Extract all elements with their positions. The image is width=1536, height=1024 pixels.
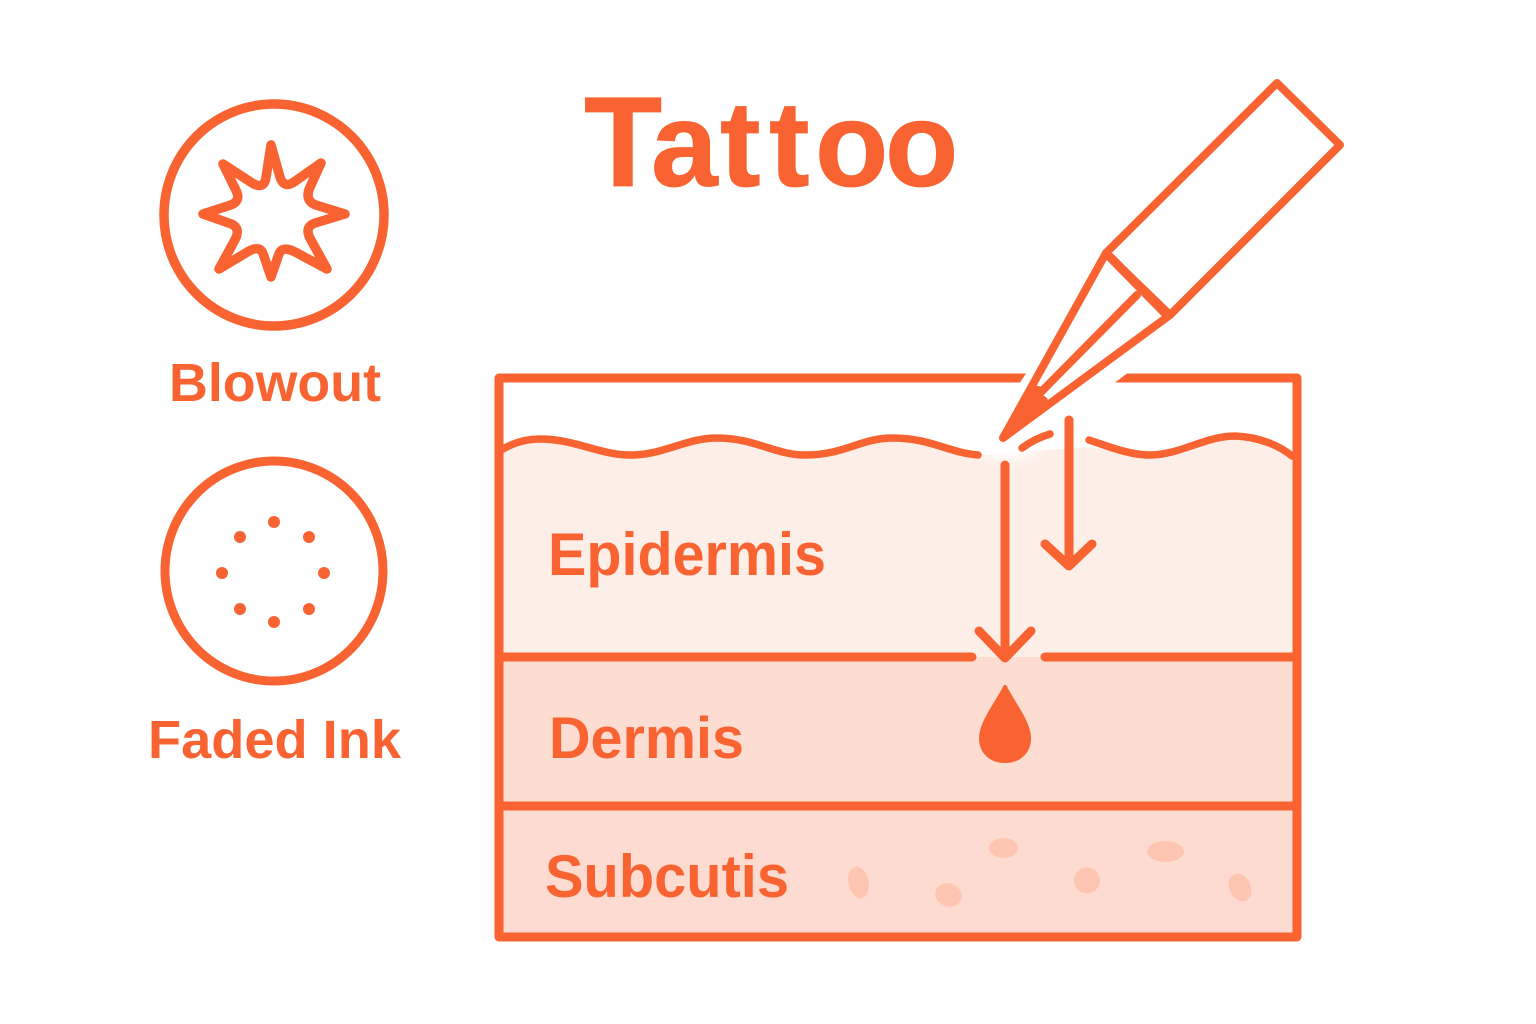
title [584,71,958,214]
icon: blowout circle [164,104,384,326]
skin surface wave [503,434,1292,456]
label: epidermis: Epidermis [548,521,826,588]
label: blowout: Blowout [169,353,381,413]
icon: faded ink circle [165,461,383,681]
title: t [769,76,810,212]
layer: subcutis fill [500,806,1296,937]
title: T [584,71,662,214]
skin outline and layer lines [499,374,1297,937]
icon: ink drop [981,687,1029,761]
arrow: long [979,465,1031,658]
title: t [720,76,761,212]
skin diagram [499,374,1297,937]
white halo at needle entry [978,433,1038,459]
label: faded ink: Faded Ink [148,710,402,770]
fat cells [845,838,1256,910]
title: o [885,78,958,212]
title: o [815,78,888,212]
layer: epidermis fill [500,436,1296,657]
label: subcutis: Subcutis [545,843,789,910]
label: dermis: Dermis [549,706,744,771]
title: a [651,78,719,212]
icon: tattoo needle pen [1003,83,1340,438]
layer: dermis fill [500,657,1296,806]
arrow: short [1045,420,1092,566]
